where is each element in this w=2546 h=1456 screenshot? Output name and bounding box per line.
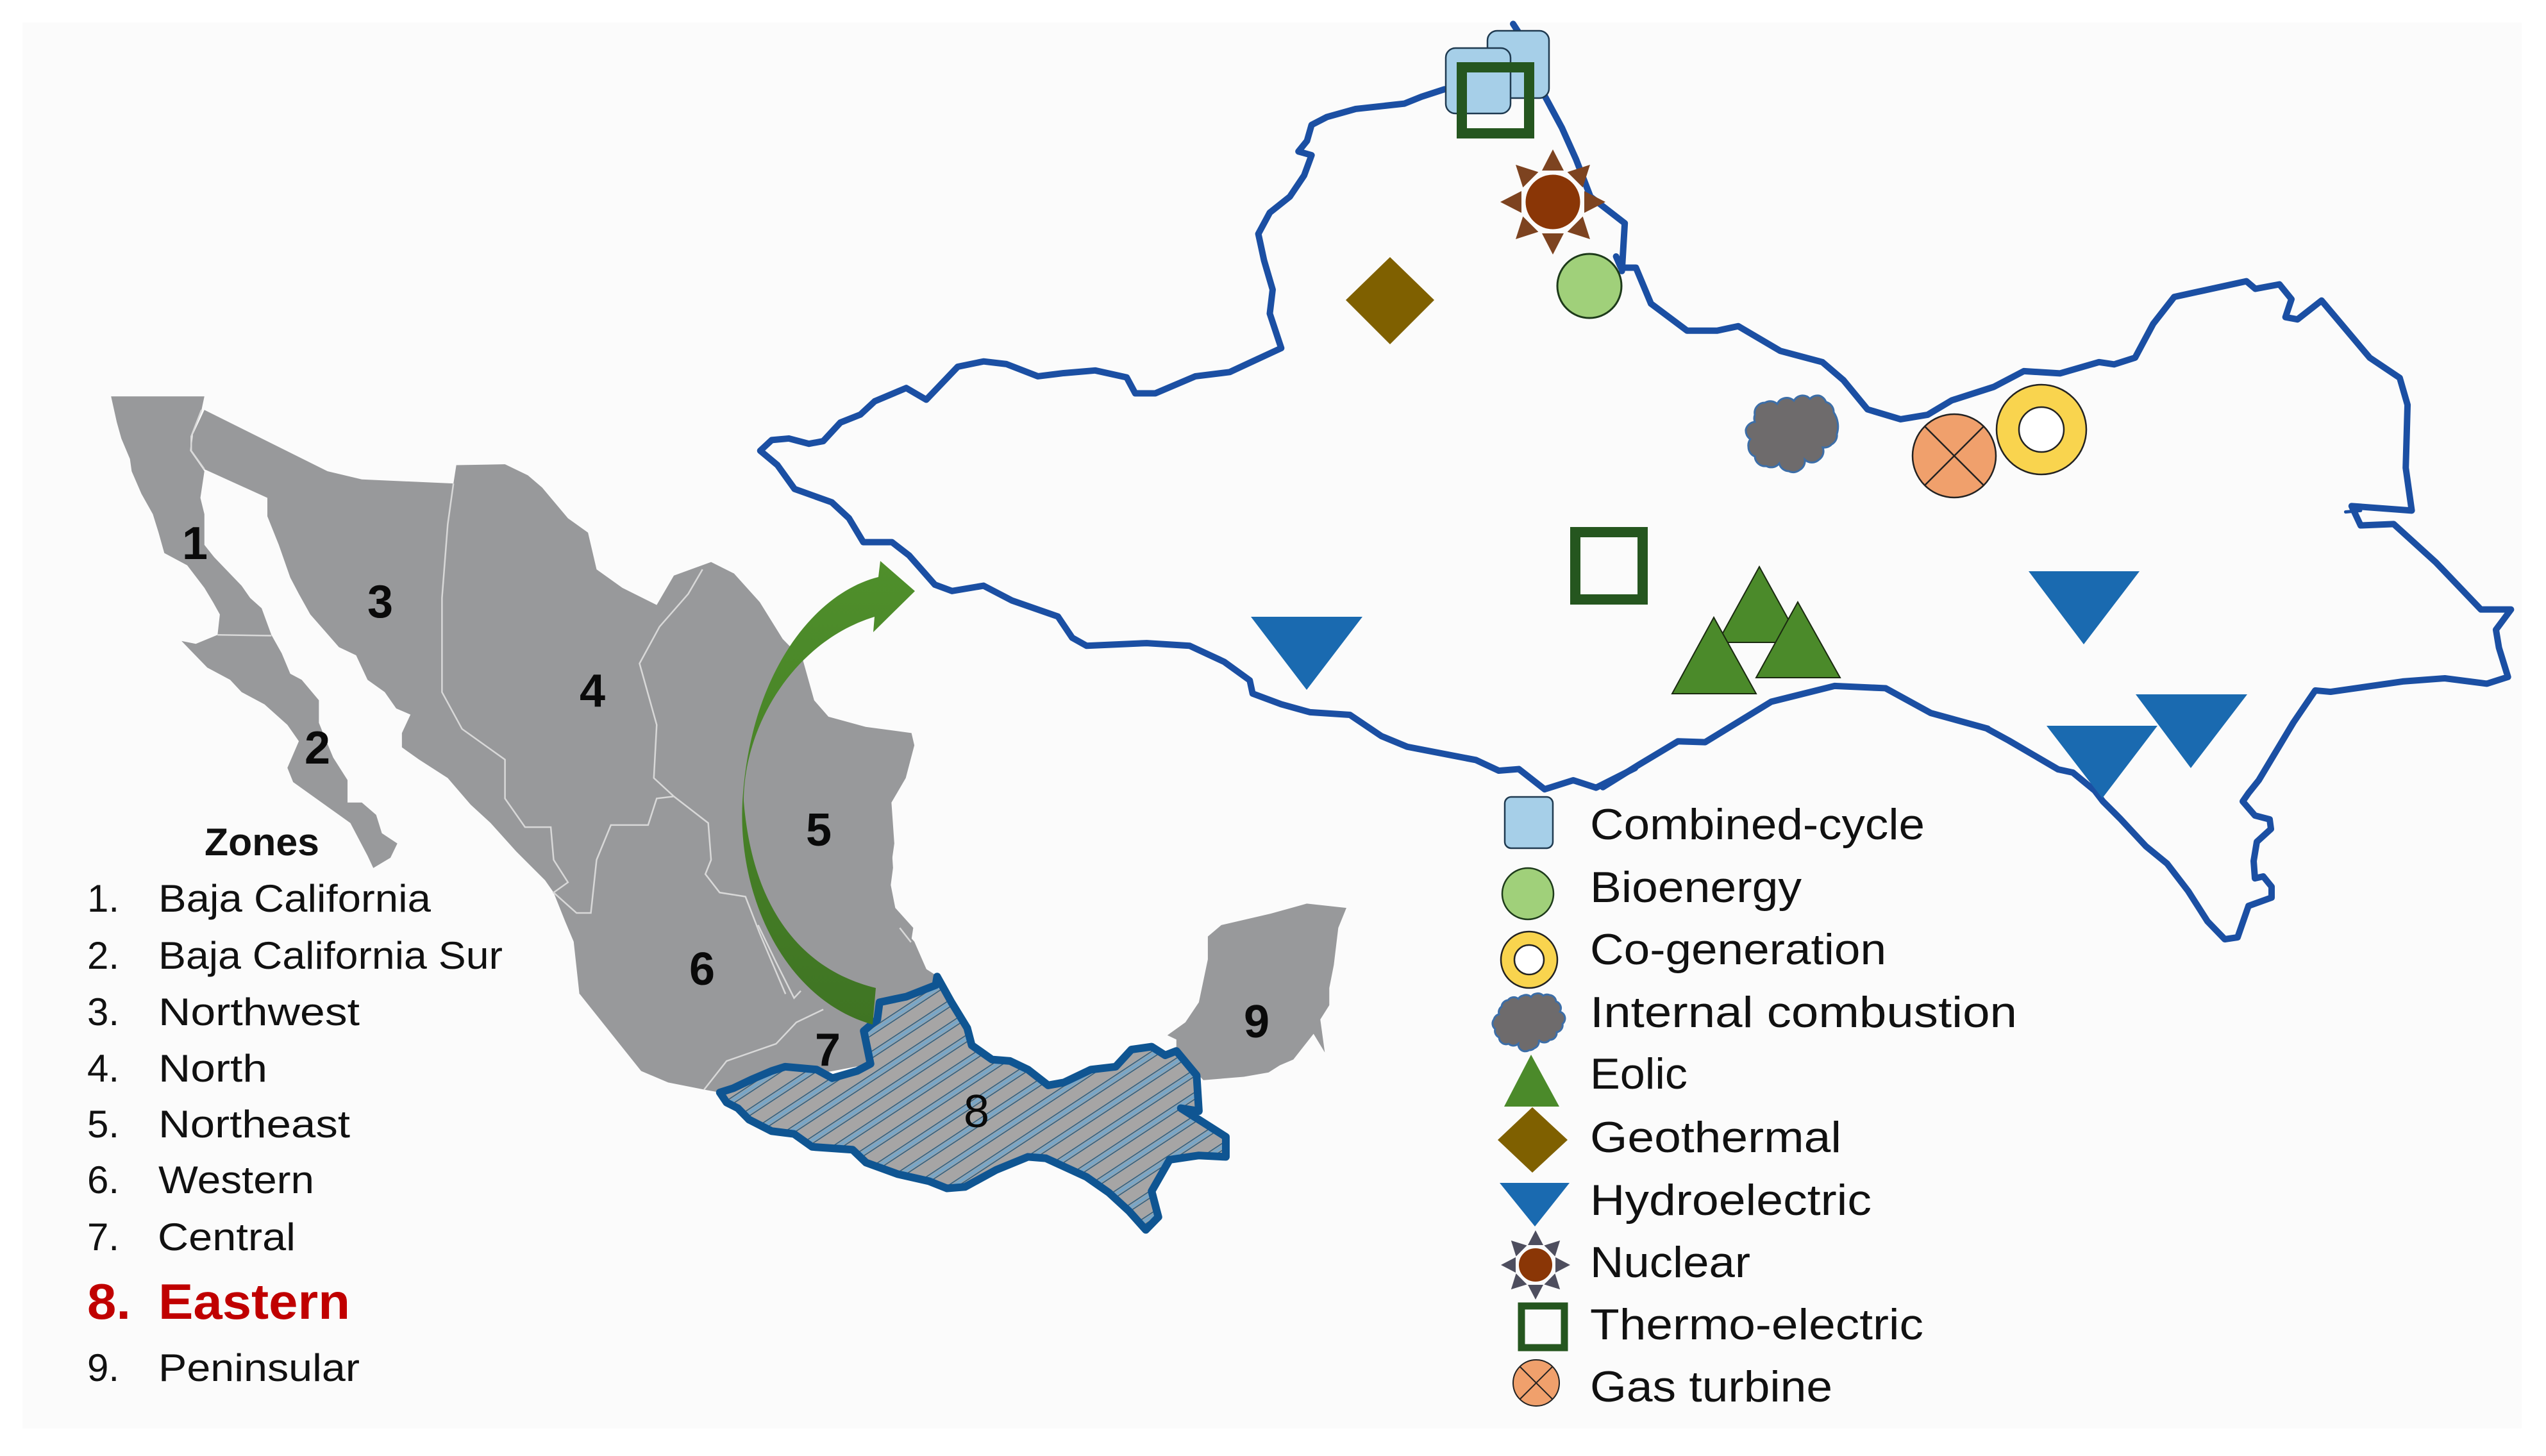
zone numbers on map [182,518,1269,1137]
legend item: gas turbine: Gas turbine [1590,1362,1832,1411]
zone 7 row: Central [158,1216,296,1259]
zone numbers on map: 5 [806,805,832,856]
zone numbers on map: 8 [964,1086,989,1137]
zone 6 row: 6. [87,1159,119,1201]
zone 9 row: 9. [87,1346,119,1389]
zone 3 row: Northwest [158,991,360,1033]
zone 8 row highlighted [87,1273,350,1330]
icon: hydroelectric west [1251,617,1362,690]
zone numbers on map: 9 [1244,996,1269,1048]
icon: hydroelectric east group [2029,571,2247,798]
icon: co-generation [1997,385,2086,474]
zone numbers on map: 1 [182,518,208,569]
mainland south [578,833,938,1092]
zone 5 row [87,1103,350,1146]
arrow: zone 8 to enlarged map [742,561,915,1025]
zone 4 row: North [158,1047,267,1090]
zone 5 row: Northeast [158,1103,350,1146]
zone 3 row: 3. [87,991,119,1033]
zones list [87,821,503,1389]
legend item: combined-cycle [1505,797,1925,849]
zone numbers on map: 4 [580,665,605,717]
legend item: co-generation: Co-generation [1590,925,1886,974]
legend item: hydroelectric: Hydroelectric [1590,1176,1872,1225]
zone 9 row [87,1346,360,1389]
icon: thermo-electric north [1462,67,1529,133]
icon: nuclear [1500,149,1605,255]
zone 2 row: Baja California Sur [158,934,503,977]
zone 7 row [87,1216,296,1259]
icon: thermo-electric central [1575,532,1643,599]
zone numbers on map: 3 [367,576,393,628]
legend item: eolic: Eolic [1590,1050,1688,1098]
mainland north [191,410,928,994]
legend item: bioenergy: Bioenergy [1590,863,1802,912]
zone numbers on map: 2 [305,723,330,774]
zone numbers on map: 6 [689,944,715,995]
icon: eolic group [1672,567,1840,694]
icon: internal combustion [1746,396,1838,473]
enlarged Eastern zone outline [760,24,2511,939]
zone numbers on map: 7 [815,1025,841,1076]
legend item: gas turbine [1513,1360,1832,1411]
zone 6 row [87,1159,314,1201]
legend item: geothermal [1498,1107,1841,1173]
legend item: nuclear: Nuclear [1590,1238,1750,1287]
zone 4 row [87,1047,267,1090]
legend item: thermo-electric: Thermo-electric [1590,1300,1923,1349]
zone 8 row highlighted: Eastern [158,1273,350,1330]
legend item: bioenergy [1502,863,1802,919]
zone borders south [704,925,911,1090]
legend: plant types [1493,797,2017,1411]
zone 7 row: 7. [87,1216,119,1259]
zone 6 row: Western [158,1159,314,1201]
icon: bioenergy [1557,254,1621,318]
legend item: eolic [1504,1050,1688,1107]
plant icons on enlarged map [1251,31,2247,798]
zone 1 row: Baja California [158,877,431,920]
icon: geothermal [1346,257,1434,344]
zone 1 Baja California [111,396,271,635]
zone 9 Peninsular [1168,903,1346,1080]
zone 4 row: 4. [87,1047,119,1090]
zone 3 row [87,991,360,1033]
legend item: hydroelectric [1500,1176,1872,1226]
zone 1 row: 1. [87,877,119,920]
legend item: nuclear [1501,1230,1750,1300]
zone 2 Baja California Sur [181,635,398,868]
zone 8 Eastern hatched [720,976,1226,1230]
zone 9 row: Peninsular [158,1346,360,1389]
zones heading: Zones [205,821,319,864]
map of Mexico [111,396,1346,1230]
legend item: co-generation [1501,925,1886,988]
legend item: combined-cycle: Combined-cycle [1590,800,1925,849]
icon: gas turbine [1913,414,1996,498]
zone 5 row: 5. [87,1103,119,1146]
zone 8 row highlighted: 8. [87,1273,131,1330]
zone 2 row: 2. [87,934,119,977]
icon: combined-cycle plants [1446,31,1549,113]
legend item: internal combustion: Internal combustion [1590,988,2017,1037]
legend item: internal combustion [1493,988,2017,1051]
legend item: geothermal: Geothermal [1590,1113,1841,1162]
zone borders north [191,410,785,994]
